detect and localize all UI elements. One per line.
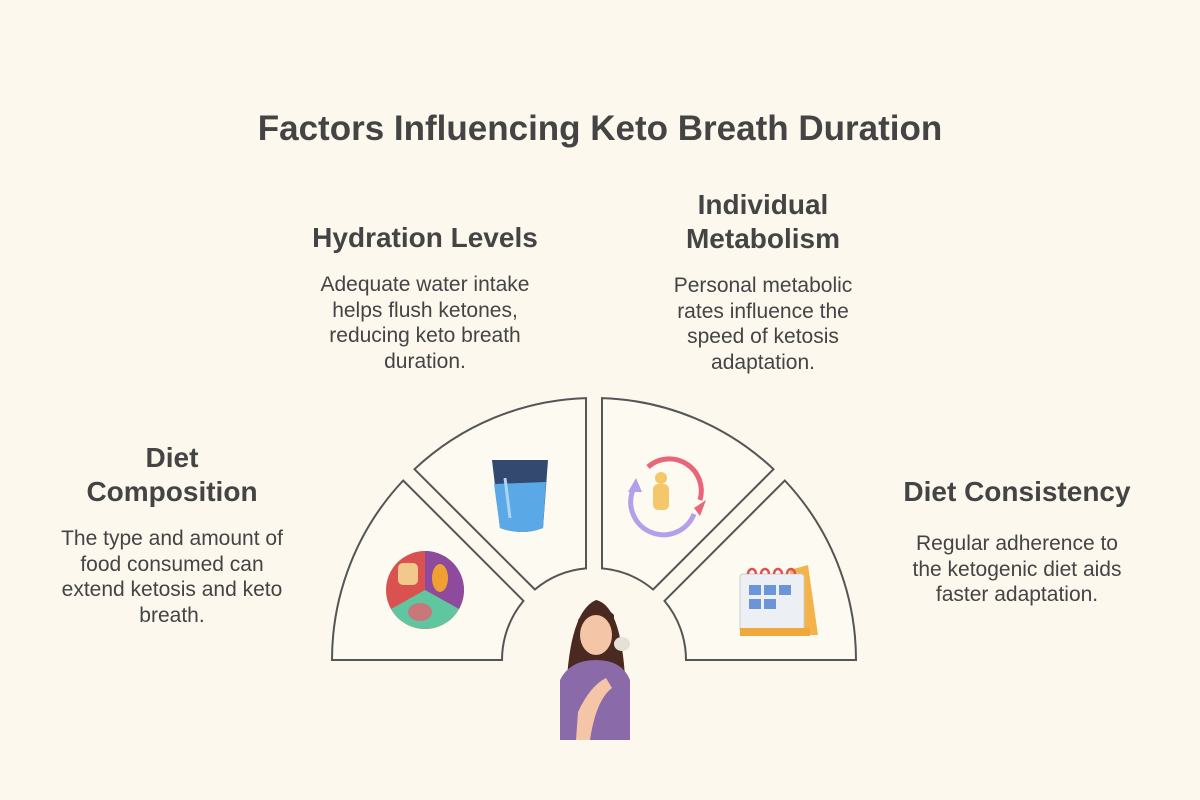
text: diet composition: extend ketosis and keto [62, 578, 282, 601]
text: individual metabolism: Individual [698, 189, 828, 220]
text: hydration levels: reducing keto breath [329, 324, 521, 347]
text: diet consistency [903, 476, 1131, 606]
text: hydration levels: Hydration Levels [312, 222, 538, 253]
icon: water glass [492, 460, 548, 532]
icon: calendar [740, 565, 818, 636]
segment: diet composition [332, 480, 524, 660]
text: individual metabolism: rates influence the [677, 300, 849, 322]
text: diet composition: Composition [86, 476, 258, 507]
icon: metabolism cycle [628, 459, 706, 535]
text: hydration levels: duration. [384, 350, 466, 372]
text: individual metabolism: adaptation. [711, 350, 815, 374]
text: diet consistency: Regular adherence to [916, 532, 1118, 555]
text: hydration levels: Adequate water intake [320, 273, 529, 296]
segment: metabolism [602, 398, 774, 590]
title: Factors Influencing Keto Breath Duration [258, 109, 942, 148]
text: hydration levels [312, 222, 538, 372]
text: hydration levels: helps flush ketones, [332, 298, 518, 322]
text: diet composition: food consumed can [80, 552, 264, 576]
text: individual metabolism [674, 189, 852, 374]
segment: consistency [664, 480, 856, 660]
text: individual metabolism: Metabolism [686, 223, 840, 254]
segment: hydration [414, 398, 586, 590]
text: individual metabolism: speed of ketosis [687, 325, 839, 348]
text: diet composition: breath. [139, 604, 205, 626]
text: diet composition: Diet [146, 442, 198, 473]
text: diet consistency: faster adaptation. [936, 583, 1098, 606]
text: diet consistency: the ketogenic diet aids [912, 558, 1121, 580]
text: diet composition [61, 442, 283, 626]
text: individual metabolism: Personal metabolic [674, 274, 852, 297]
text: diet consistency: Diet Consistency [903, 476, 1131, 507]
icon: woman [560, 600, 630, 740]
icon: food plate [386, 551, 464, 629]
text: diet composition: The type and amount of [61, 527, 283, 550]
